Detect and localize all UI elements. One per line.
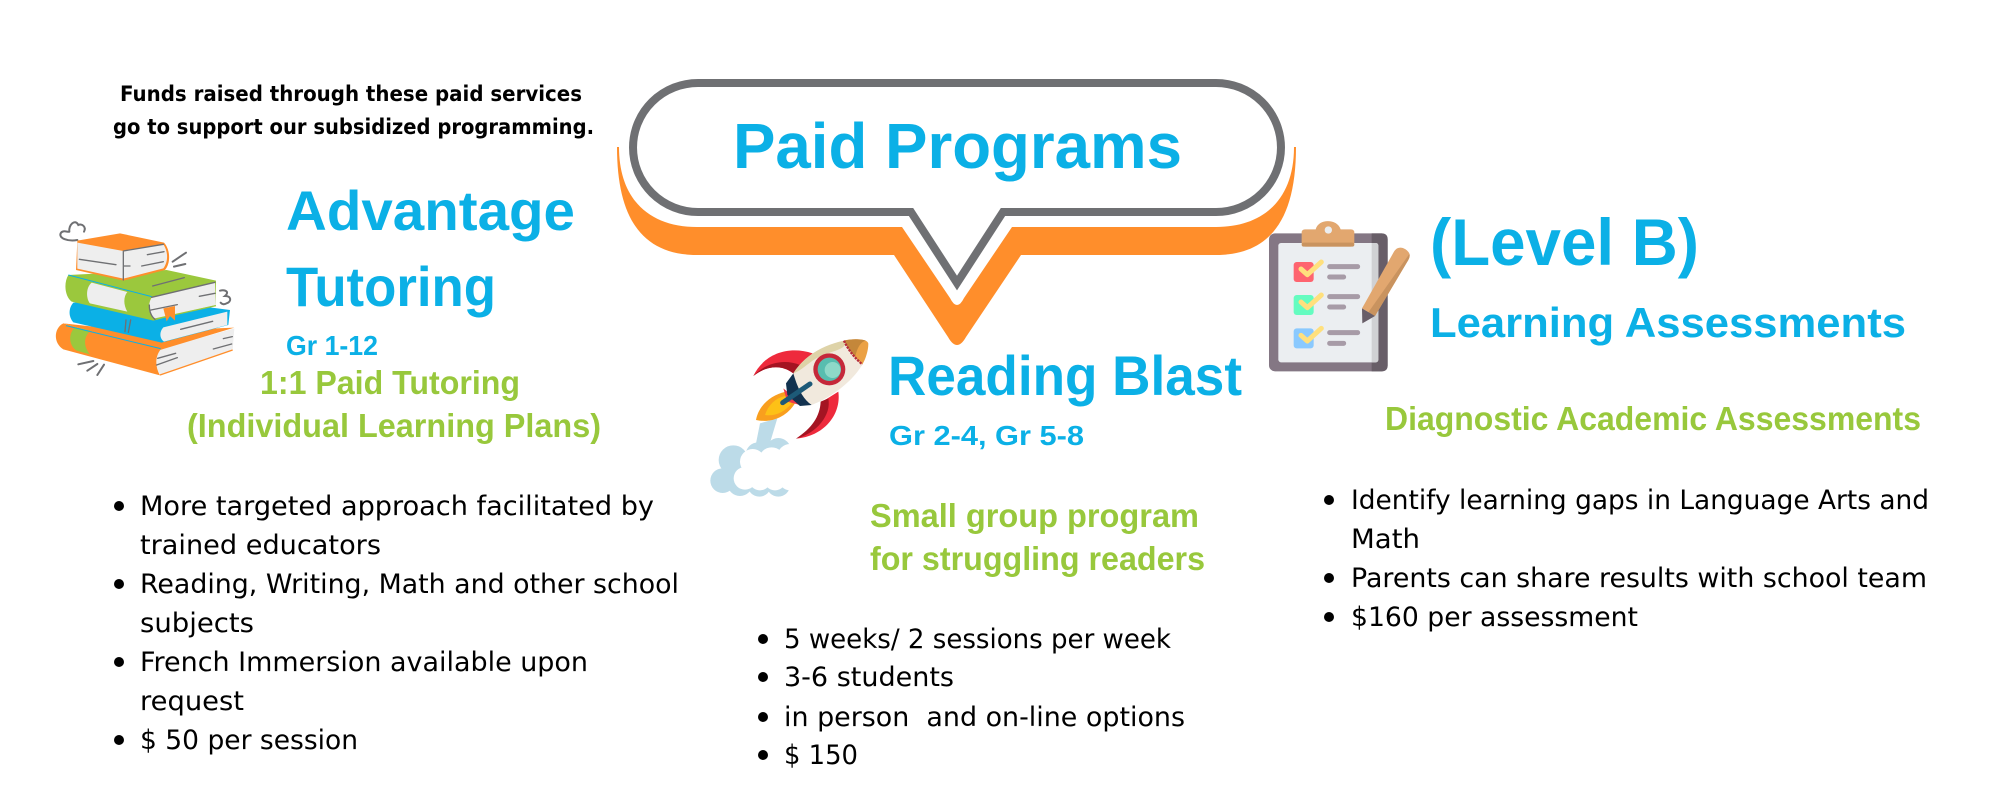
bubble orange shadow [617,147,1296,345]
blue book [70,300,230,343]
top book [76,233,169,281]
heading [1430,205,1906,346]
bullet list: 5 weeks/ 2 sessions per week [784,624,1171,655]
heading [286,179,575,318]
subtitle: Diagnostic Academic Assessments [1385,400,1921,437]
bullet list [1324,485,1929,633]
panel: reading blast [758,344,1242,771]
icon: rocket [710,339,868,497]
heading: Learning Assessments [1430,299,1906,346]
porthole [813,353,845,385]
bullet list: French Immersion available upon [140,647,588,678]
subtitle: (Individual Learning Plans) [187,407,601,444]
icon: stack of books [56,222,234,375]
green book [65,270,216,321]
subtitle: 1:1 Paid Tutoring [260,364,520,401]
subtitle: for struggling readers [870,540,1205,577]
subtitle: Small group program [870,497,1199,534]
bullet list [758,624,1185,771]
heading: Tutoring [286,255,496,318]
nose cone [844,339,868,364]
speech bubble title [617,83,1296,345]
fins [753,350,813,376]
bullet list: trained educators [140,530,381,561]
bullet list: request [140,686,244,717]
bottom book [156,328,234,374]
funding note: Funds raised through these paid services [120,82,582,106]
strut [783,384,810,403]
bubble white gap [619,147,1294,305]
smoke [755,418,777,448]
bullet list: More targeted approach facilitated by [140,491,654,522]
body [786,373,812,406]
subtitle [187,364,601,444]
bullet list: $160 per assessment [1351,602,1638,633]
panel: learning assessments [1324,205,1929,633]
panel: advantage tutoring [114,179,679,756]
flame [756,392,795,421]
pencil [1362,248,1410,316]
heading: (Level B) [1430,205,1699,279]
bullet list: Math [1351,524,1420,555]
bullet list: $ 150 [784,740,858,771]
bullet list: in person and on-line options [784,702,1185,733]
heading: Advantage [286,179,575,242]
title: Paid Programs [733,110,1182,182]
subtitle [870,497,1205,577]
heading: Reading Blast [888,344,1242,407]
bullet list: Reading, Writing, Math and other school [140,569,679,600]
bubble outline [633,83,1281,283]
bullet list: Identify learning gaps in Language Arts and [1351,485,1929,516]
funding note: go to support our subsidized programming. [113,115,594,139]
bullet list: Parents can share results with school team [1351,563,1927,594]
grade label: Gr 2-4, Gr 5-8 [889,420,1084,451]
bullet list: 3-6 students [784,662,954,693]
bullet list: subjects [140,608,254,639]
grade label: Gr 1-12 [286,330,378,361]
icon: clipboard [1269,221,1410,371]
bullet list [114,491,679,756]
funding note [113,82,594,139]
bullet list: $ 50 per session [140,725,358,756]
